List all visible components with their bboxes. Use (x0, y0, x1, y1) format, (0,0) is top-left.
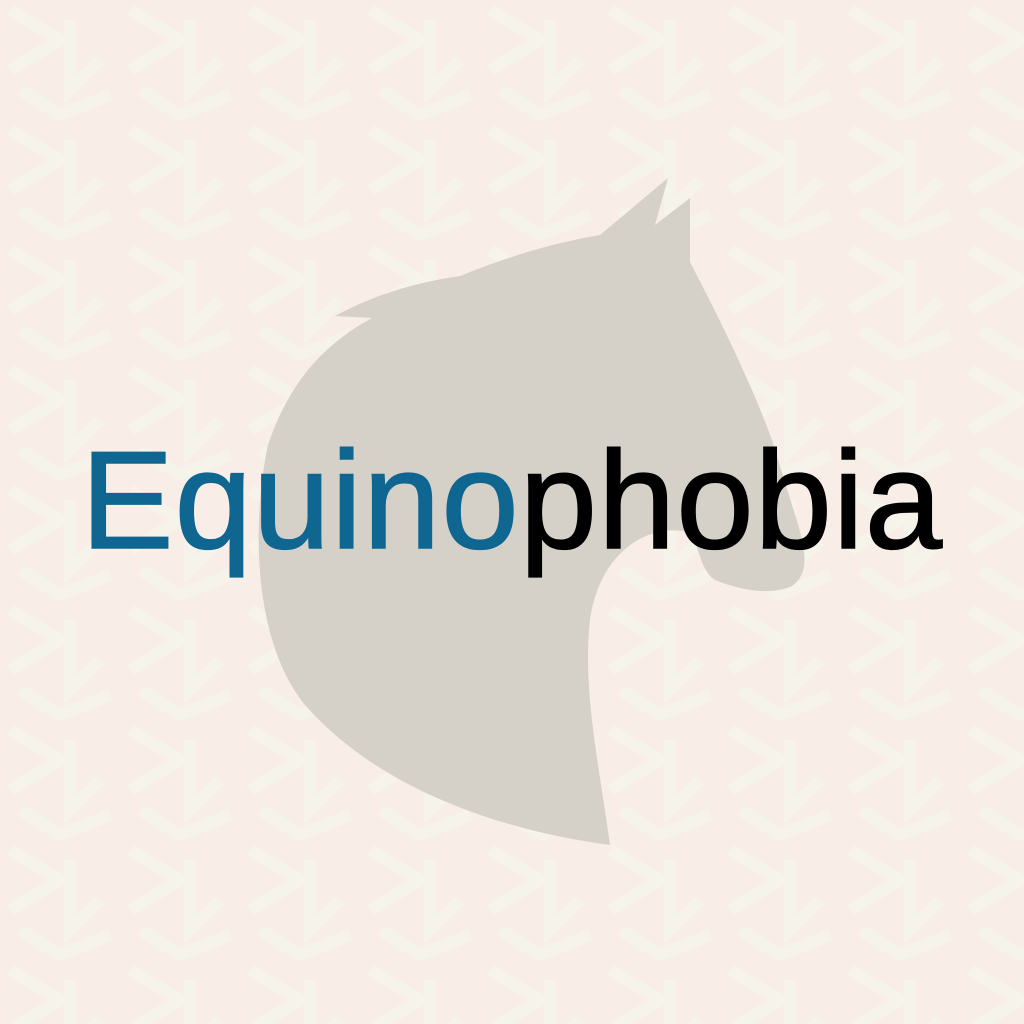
icon: horse head silhouette (259, 178, 805, 845)
title: Equinophobia (81, 423, 943, 578)
